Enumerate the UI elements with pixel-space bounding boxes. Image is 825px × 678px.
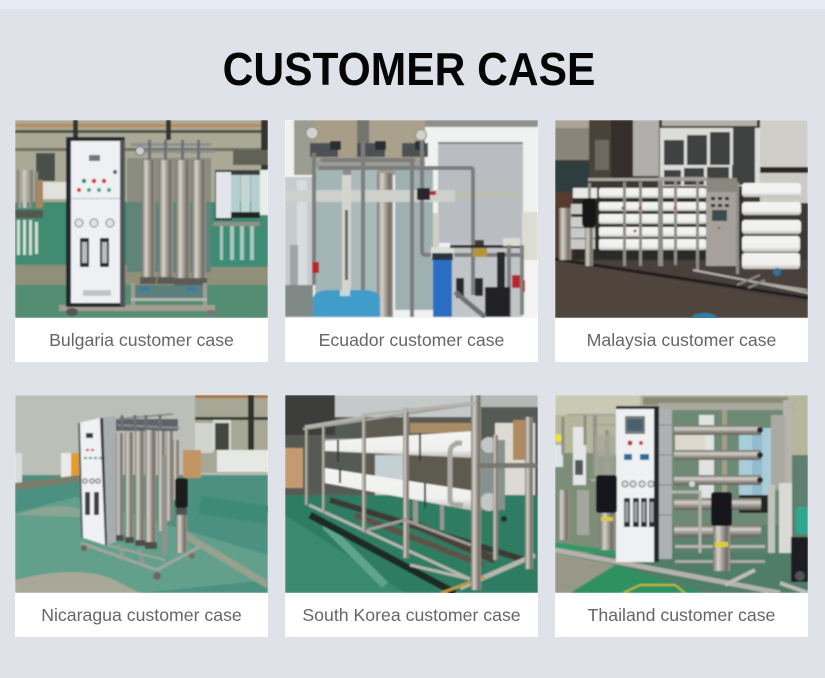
- panel: Bulgaria customer case: [15, 120, 268, 362]
- caption: South Korea customer case: [302, 605, 521, 625]
- top strip: [0, 0, 825, 9]
- photo: Malaysia RO plant: [555, 120, 808, 318]
- caption: Ecuador customer case: [319, 330, 504, 350]
- photo: Nicaragua water treatment unit: [15, 395, 268, 593]
- panel: South Korea customer case: [285, 395, 538, 637]
- panel: Ecuador customer case: [285, 120, 538, 362]
- title: CUSTOMER CASE: [223, 43, 595, 95]
- photo: Bulgaria water treatment unit: [15, 120, 268, 318]
- caption: Nicaragua customer case: [41, 605, 242, 625]
- caption: Bulgaria customer case: [49, 330, 234, 350]
- caption: Malaysia customer case: [587, 330, 776, 350]
- photo: South Korea RO frame: [285, 395, 538, 593]
- panel: Nicaragua customer case: [15, 395, 268, 637]
- panel: Malaysia customer case: [555, 120, 808, 362]
- photo: Thailand RO system: [555, 395, 808, 593]
- caption: Thailand customer case: [588, 605, 775, 625]
- panel: Thailand customer case: [555, 395, 808, 637]
- photo: Ecuador filter tanks: [285, 120, 538, 318]
